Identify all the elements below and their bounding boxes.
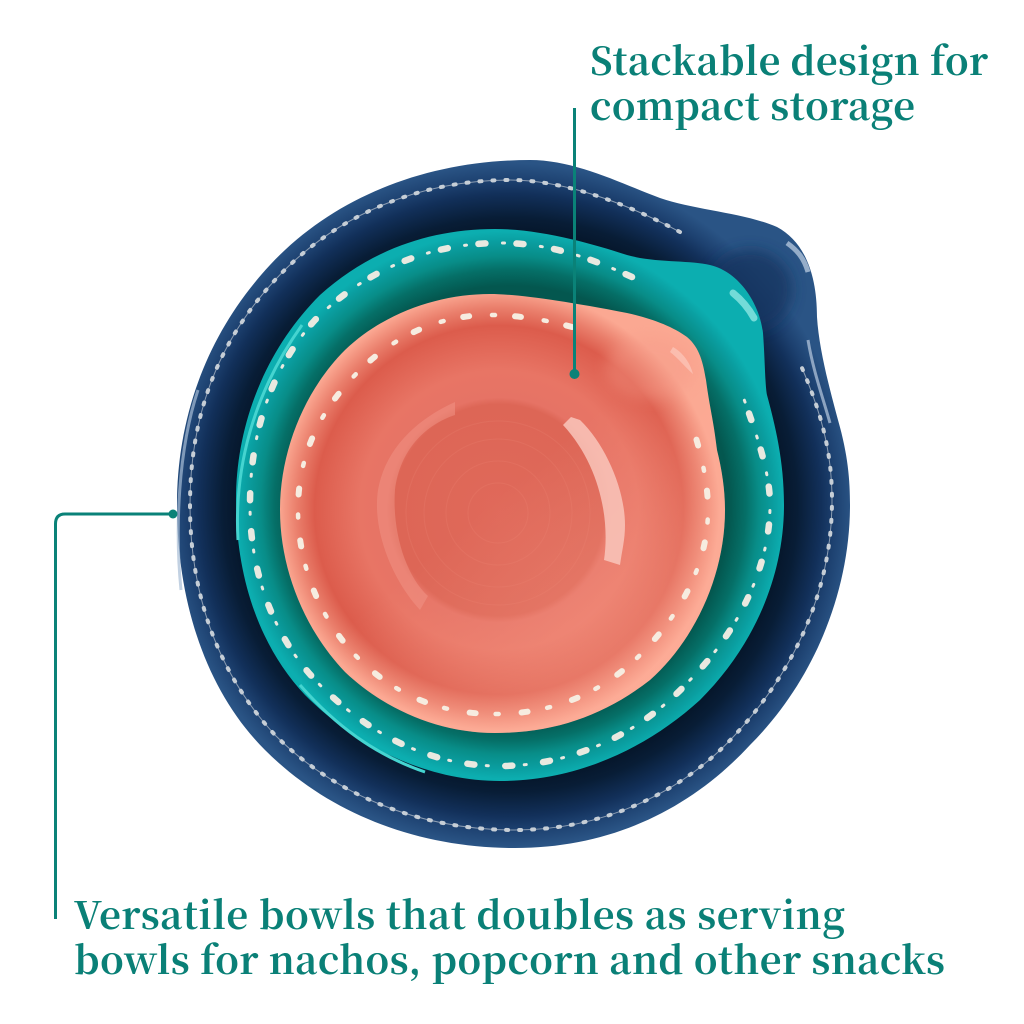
coral outer shape — [280, 294, 725, 733]
callout text: versatile bowls: bowls for nachos, popcorn and other snacks — [74, 930, 945, 985]
callout text: versatile bowls — [74, 885, 945, 985]
coral spout — [605, 336, 695, 400]
navy outer shape — [177, 160, 850, 848]
coral throwing rings — [406, 421, 590, 605]
callout text: stackable design: Stackable design for — [590, 31, 988, 86]
navy spout shading — [708, 250, 792, 330]
teal bowl — [236, 229, 784, 781]
coral bowl — [280, 294, 725, 733]
teal floral decoration — [250, 243, 770, 766]
coral floral decoration — [298, 315, 708, 714]
navy bowl — [177, 160, 850, 848]
callout text: stackable design: compact storage — [590, 76, 915, 131]
callout text: versatile bowls: Versatile bowls that doubles as serving — [74, 885, 845, 940]
navy vine decoration — [190, 180, 832, 830]
callout leader: versatile — [56, 510, 178, 919]
coral glaze highlights — [377, 347, 693, 610]
coral lower-right lighting — [280, 294, 725, 733]
callout leader: stackable — [570, 108, 580, 379]
callout text: stackable design — [590, 31, 988, 131]
teal outer shape — [236, 229, 784, 781]
